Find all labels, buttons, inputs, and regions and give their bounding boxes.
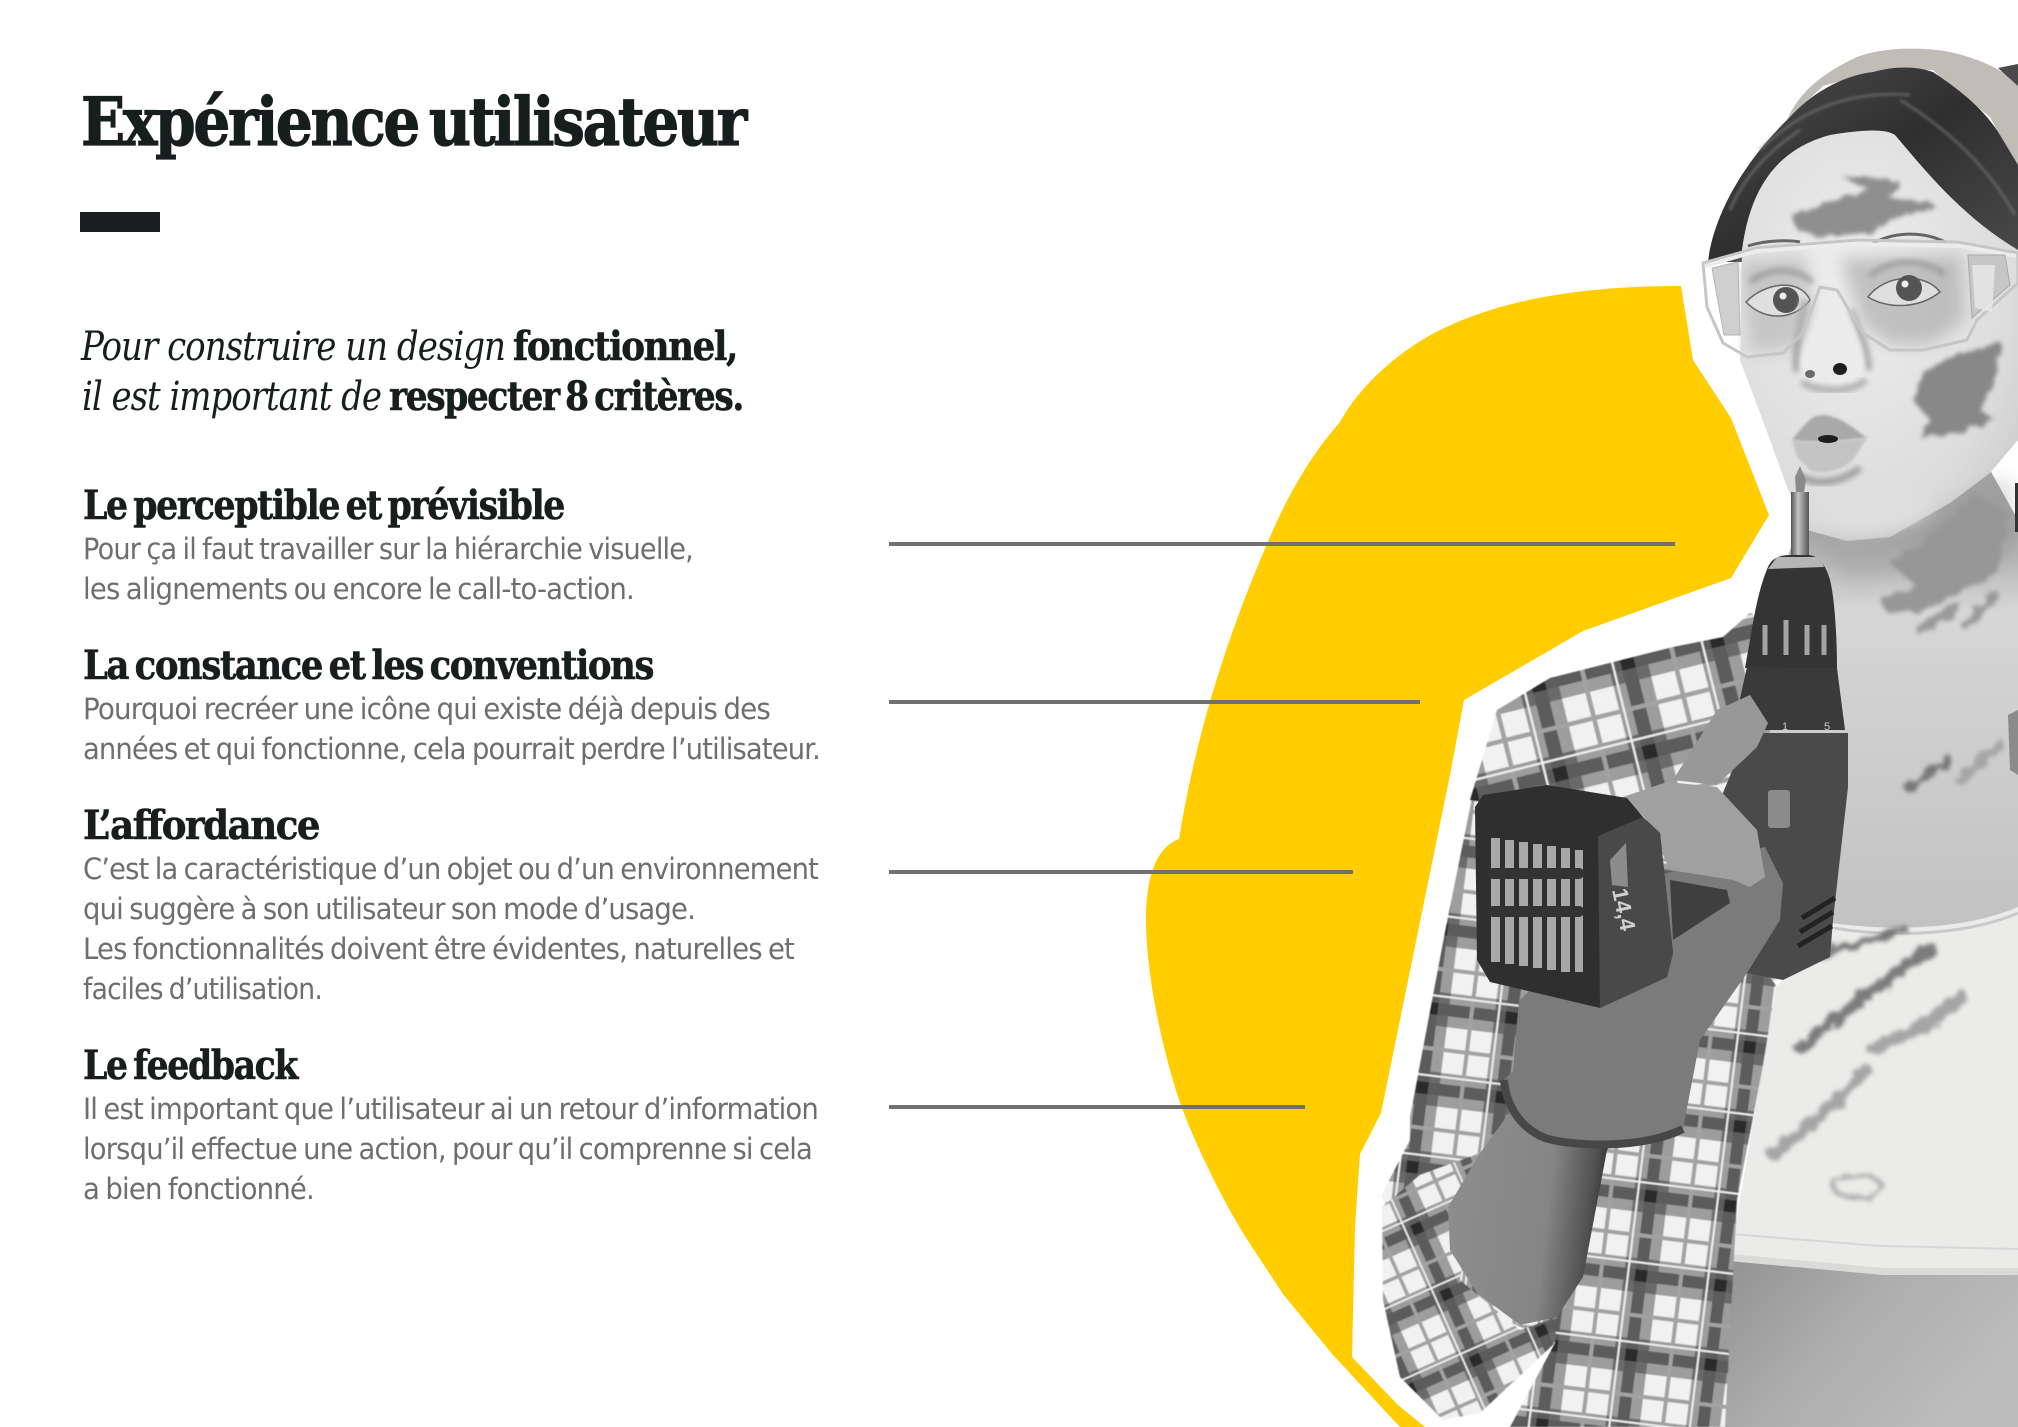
side hair [2015, 483, 2018, 532]
tank top [1729, 907, 2018, 1275]
intro text [80, 323, 743, 420]
drill shaft [1791, 492, 1809, 556]
criterion: le feedback: Le feedback [83, 1042, 299, 1089]
criterion: le perceptible et prévisible: les alignements ou encore le call-to-action. [83, 572, 634, 606]
criterion: la constance et les conventions: années et qui fonctionne, cela pourrait perdre l’utilisateur. [83, 732, 820, 766]
criterion: la constance et les conventions [83, 642, 820, 766]
belly [1718, 1255, 2018, 1427]
glove [1504, 695, 1783, 1147]
criterion: le perceptible et prévisible [83, 482, 693, 606]
upper fingers [1673, 695, 1768, 785]
grip [1670, 880, 1730, 940]
criterion: le feedback [83, 1042, 818, 1206]
cheek smudge [1913, 343, 2003, 438]
forearm [1448, 1112, 1615, 1325]
back hair [1998, 64, 2018, 86]
intro text: il est important de [82, 374, 381, 420]
criterion: le feedback: Il est important que l’utilisateur ai un retour d’information [83, 1092, 818, 1126]
criterion: le feedback: lorsqu’il effectue une action, pour qu’il comprenne si cela [83, 1132, 812, 1166]
criterion: l'affordance: C’est la caractéristique d’un objet ou d’un environnement [83, 852, 818, 886]
speed markings: 1 [1782, 721, 1788, 733]
hair strands [1730, 94, 2015, 215]
face and hair [1703, 49, 2018, 630]
plaid shirt [1381, 613, 1776, 1427]
criterion: le perceptible et prévisible: Pour ça il faut travailler sur la hiérarchie visuelle, [83, 532, 693, 566]
chin highlight [1810, 481, 1930, 529]
nose [1797, 295, 1868, 390]
grille dots [1488, 868, 1584, 917]
speed markings: 5 [1824, 721, 1830, 733]
criterion: l'affordance: qui suggère à son utilisateur son mode d’usage. [83, 892, 695, 926]
yellow background shape [1146, 286, 1769, 1427]
direction switch [1768, 790, 1790, 828]
criterion: la constance et les conventions: Pourquoi recréer une icône qui existe déjà depuis des [83, 692, 770, 726]
battery [1475, 785, 1673, 1008]
neck and chest [1740, 470, 2018, 935]
intro text: respecter 8 critères. [389, 373, 743, 420]
eyes [1746, 234, 1945, 316]
connector line 2 [889, 700, 1420, 704]
illustration: woman with drill [1381, 49, 2018, 1427]
connector line 4 [889, 1105, 1305, 1109]
drill bit [1795, 466, 1806, 492]
criterion: l'affordance: faciles d’utilisation. [83, 972, 322, 1006]
drill [1720, 466, 1848, 980]
criterion: le perceptible et prévisible: Le perceptible et prévisible [83, 482, 564, 529]
forehead smudge [1792, 177, 1933, 237]
neck smudge [1880, 493, 2010, 630]
connector line 3 [889, 870, 1353, 874]
battery label [1607, 843, 1641, 934]
jaw shadow [1810, 480, 2012, 580]
cuff [1504, 1080, 1683, 1144]
lips [1792, 415, 1867, 482]
safety glasses [1703, 240, 2018, 357]
intro text: Pour construire un design [80, 324, 505, 370]
bandana [1787, 49, 2018, 170]
intro text: fonctionnel, [513, 323, 737, 370]
title: Expérience utilisateur [81, 83, 748, 161]
criterion: la constance et les conventions: La constance et les conventions [83, 642, 653, 689]
drill collar [1733, 667, 1845, 730]
criterion: l'affordance: Les fonctionnalités doivent être évidentes, naturelles et [83, 932, 794, 966]
eye shadow in lenses [1740, 255, 1815, 352]
hair [1708, 68, 2018, 262]
grille [1491, 838, 1583, 972]
shirt collar at edge [2008, 710, 2018, 775]
vents [1798, 898, 1835, 946]
criterion: le feedback: a bien fonctionné. [83, 1172, 314, 1206]
criterion: l'affordance: L’affordance [83, 802, 319, 849]
chuck [1745, 555, 1837, 668]
connector line 1 [889, 542, 1675, 546]
criterion: l'affordance [83, 802, 818, 1006]
battery side [1598, 817, 1673, 1008]
middle finger section [1623, 782, 1765, 887]
lower glove [1504, 847, 1783, 1147]
speed markings [1782, 721, 1830, 733]
face skin [1740, 130, 2018, 541]
tank top smudges [1760, 745, 2000, 1198]
battery label: 14,4 [1607, 886, 1641, 934]
drill body [1720, 733, 1848, 980]
title accent bar [80, 212, 160, 232]
